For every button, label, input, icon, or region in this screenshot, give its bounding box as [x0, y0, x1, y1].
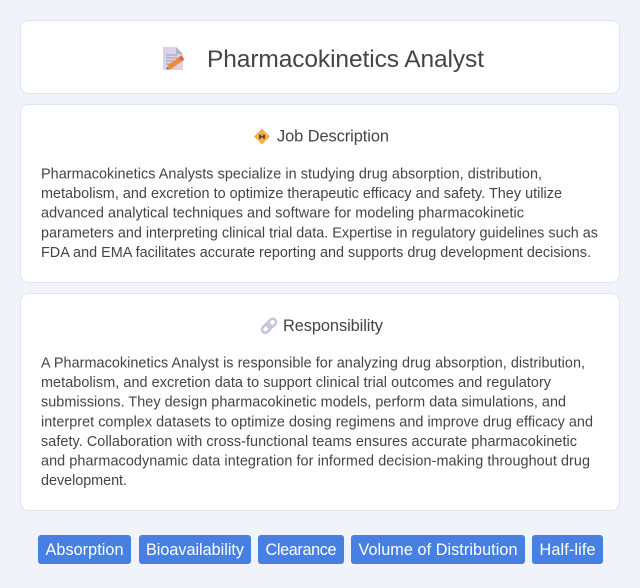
- heading: responsibility: Responsibility: [283, 317, 384, 335]
- tag: bioavailability: Bioavailability: [146, 541, 245, 559]
- text block: job description: [41, 166, 598, 261]
- tag: clearance: [258, 535, 344, 564]
- title: Pharmacokinetics Analyst: [207, 46, 484, 73]
- panel: job description: [20, 104, 620, 282]
- text block: responsibility: [41, 356, 593, 489]
- icon: diamond sign: [254, 128, 270, 144]
- tag: absorption: [38, 535, 131, 564]
- tag: volume of distribution: [351, 535, 525, 564]
- icon: chain link: [261, 317, 277, 334]
- text block: responsibility: metabolism, and excretion data to support clinical trial outcomes and regulatory: [41, 375, 552, 391]
- tags row: [38, 535, 603, 564]
- tag: volume of distribution: Volume of Distribution: [358, 541, 518, 559]
- text block: responsibility: development.: [41, 473, 127, 489]
- tag: absorption: Absorption: [46, 541, 124, 559]
- tag: clearance: Clearance: [266, 541, 336, 559]
- icon: document with pencil: [163, 47, 183, 70]
- tag: half-life: [532, 535, 603, 564]
- panel: responsibility: [20, 294, 620, 510]
- heading: job description: Job Description: [277, 128, 389, 146]
- text block: job description: metabolism, and excretion to optimize therapeutic efficacy and safety. They utilize: [41, 186, 562, 202]
- text block: job description: Pharmacokinetics Analysts specialize in studying drug absorption, distribution,: [41, 166, 542, 182]
- text block: responsibility: and pharmacodynamic data integration for informed decision-making throughout drug: [41, 454, 590, 470]
- text block: job description: parameters and interpreting clinical trial data. Expertise in regulatory guidelines such as: [41, 225, 598, 241]
- text block: job description: advanced analytical techniques and software for modeling pharmacokinetic: [41, 206, 524, 222]
- tag: bioavailability: [139, 535, 251, 564]
- text block: job description: FDA and EMA facilitates accurate reporting and supports drug development decisions.: [41, 245, 591, 261]
- text block: responsibility: submissions. They design pharmacokinetic models, perform data simulations, and: [41, 395, 566, 411]
- text block: responsibility: interpret complex datasets to optimize dosing regimens and improve drug efficacy and: [41, 414, 593, 430]
- panel: header: [20, 20, 620, 94]
- tag: half-life: Half-life: [540, 541, 596, 559]
- text block: responsibility: safety. Collaboration with cross-functional teams ensures accurate pharmacokinetic: [41, 434, 577, 450]
- text block: responsibility: A Pharmacokinetics Analyst is responsible for analyzing drug absorption, distribution,: [41, 356, 585, 372]
